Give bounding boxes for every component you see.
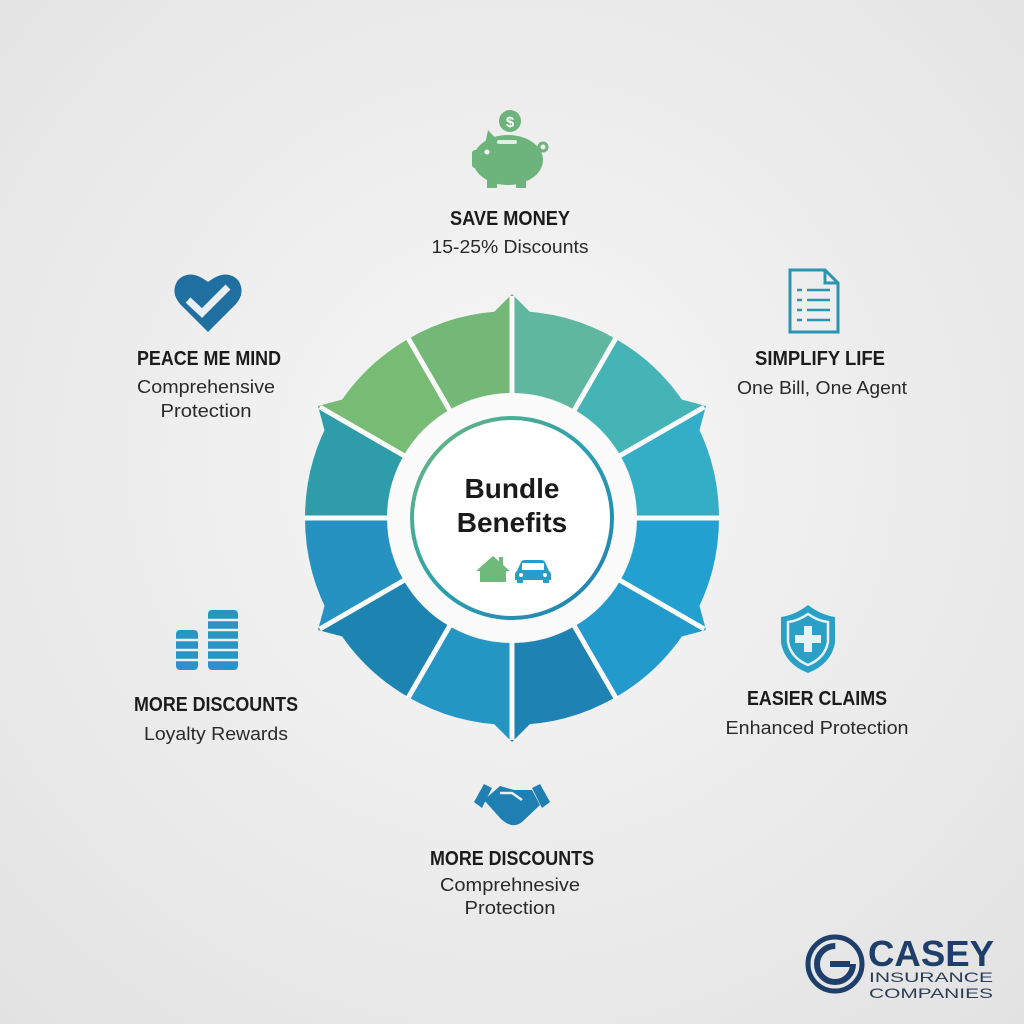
logo: casey insurance companies: INSURANCE [869, 969, 993, 985]
text: more discounts loyalty: MORE DISCOUNTS [134, 694, 298, 716]
icon: piggy bank: $ [506, 114, 515, 131]
center title: Bundle [465, 473, 559, 504]
wheel: bundle benefits ring [304, 294, 720, 742]
text: peace me mind: Protection [160, 401, 252, 421]
text: save money [432, 208, 588, 257]
text: more discounts comprehensive [430, 848, 594, 918]
icon: shield plus [781, 605, 835, 673]
text: more discounts comprehensive: Protection [464, 898, 556, 918]
icon: handshake [474, 784, 550, 825]
icon: document checklist [790, 270, 838, 332]
text: peace me mind [137, 348, 281, 421]
text: easier claims: Enhanced Protection [726, 718, 908, 738]
text: save money: 15-25% Discounts [432, 237, 588, 257]
icon: piggy bank [472, 110, 547, 188]
icon: house [476, 556, 510, 582]
text: simplify life: One Bill, One Agent [737, 378, 907, 398]
logo: casey insurance companies [808, 933, 994, 1001]
icon: coin stacks [176, 610, 238, 670]
logo: casey insurance companies: COMPANIES [869, 985, 993, 1001]
text: peace me mind: Comprehensive [137, 377, 275, 397]
logo: casey insurance companies: CASEY [868, 933, 994, 974]
text: save money: SAVE MONEY [450, 208, 571, 230]
text: more discounts loyalty [134, 694, 298, 744]
icon: car [515, 560, 551, 583]
center hub: Benefits [457, 507, 567, 538]
icon: heart check [174, 274, 242, 332]
text: more discounts comprehensive: MORE DISCOUNTS [430, 848, 594, 870]
text: peace me mind: PEACE ME MIND [137, 348, 281, 370]
text: simplify life [737, 348, 907, 398]
text: easier claims: EASIER CLAIMS [747, 688, 887, 710]
center hub [388, 394, 636, 642]
text: easier claims [726, 688, 908, 738]
text: simplify life: SIMPLIFY LIFE [755, 348, 885, 370]
text: more discounts loyalty: Loyalty Rewards [144, 724, 288, 744]
text: more discounts comprehensive: Comprehnesive [440, 875, 580, 895]
